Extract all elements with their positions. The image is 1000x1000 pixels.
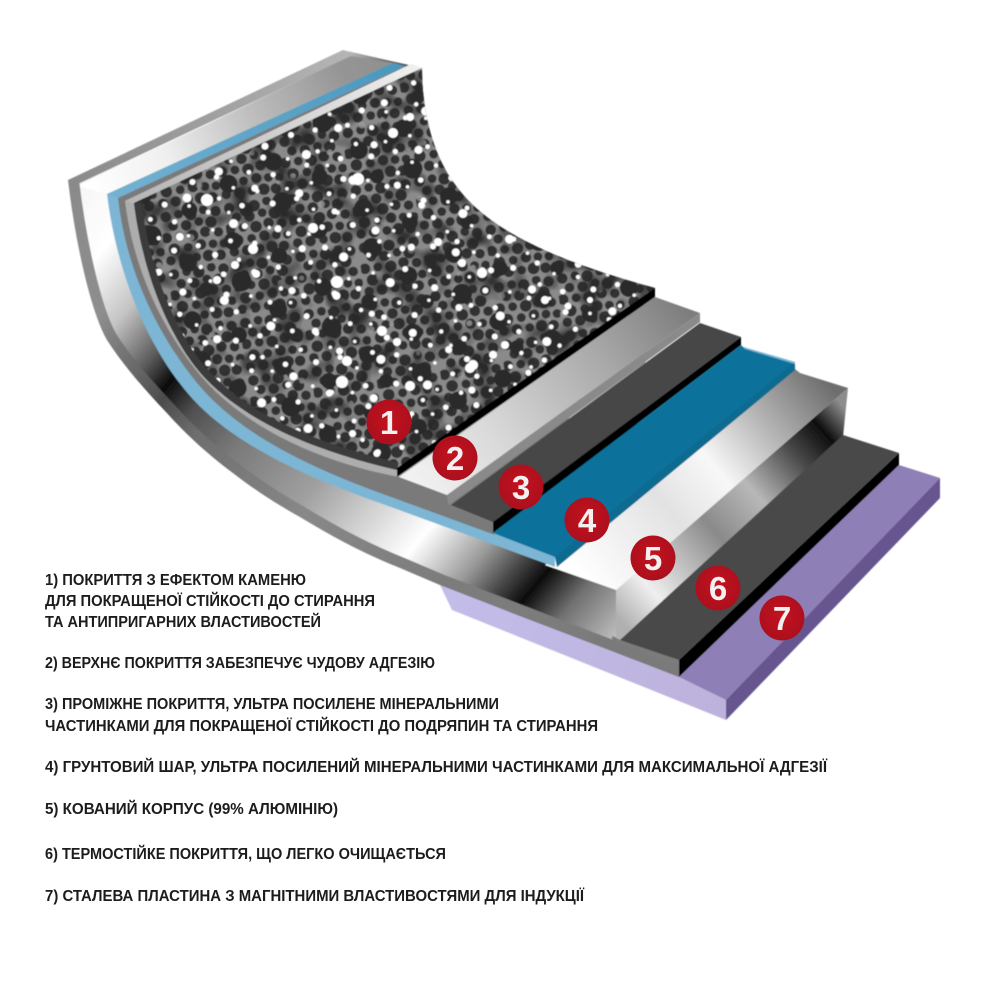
legend item 1: ДЛЯ ПОКРАЩЕНОЇ СТІЙКОСТІ ДО СТИРАННЯ <box>45 592 375 610</box>
marker 7 <box>760 596 804 640</box>
layer 3: intermediate coating face <box>451 323 741 533</box>
legend item 3: 3) ПРОМІЖНЕ ПОКРИТТЯ, УЛЬТРА ПОСИЛЕНЕ МІНЕРАЛЬНИМИ <box>45 696 499 713</box>
marker 3 <box>498 464 544 510</box>
layer 5: forged aluminium body <box>68 50 848 677</box>
legend item 4: 4) ГРУНТОВИЙ ШАР, УЛЬТРА ПОСИЛЕНИЙ МІНЕРАЛЬНИМИ ЧАСТИНКАМИ ДЛЯ МАКСИМАЛЬНОЇ АДГЕЗІЇ <box>45 758 828 776</box>
marker 4: 4 <box>578 502 597 539</box>
legend item 6: 6) ТЕРМОСТІЙКЕ ПОКРИТТЯ, ЩО ЛЕГКО ОЧИЩАЄТЬСЯ <box>45 845 446 863</box>
legend item 7: 7) СТАЛЕВА ПЛАСТИНА З МАГНІТНИМИ ВЛАСТИВОСТЯМИ ДЛЯ ІНДУКЦІЇ <box>45 888 585 905</box>
legend item 1: ТА АНТИПРИГАРНИХ ВЛАСТИВОСТЕЙ <box>45 613 321 631</box>
marker 7: 7 <box>773 600 791 637</box>
marker 1 <box>366 400 412 444</box>
rim of the light grey band <box>125 64 422 203</box>
layered pan cross-section diagram <box>68 50 940 720</box>
legend item 1: 1) ПОКРИТТЯ З ЕФЕКТОМ КАМЕНЮ <box>45 572 306 589</box>
marker 5: 5 <box>644 540 662 577</box>
layer 3 edge: mid grey band along the curve <box>118 66 655 535</box>
marker 6 <box>696 566 740 610</box>
layer 4 edge: light blue band along the curve <box>107 63 555 567</box>
marker 6: 6 <box>709 570 727 607</box>
marker 2 <box>432 436 478 480</box>
legend text <box>45 572 828 905</box>
marker 3: 3 <box>512 469 530 506</box>
marker 2: 2 <box>446 440 464 477</box>
layer 6: dark heat-resistant coating <box>620 435 899 677</box>
legend item 2: 2) ВЕРХНЄ ПОКРИТТЯ ЗАБЕЗПЕЧУЄ ЧУДОВУ АДГЕЗІЮ <box>45 655 435 672</box>
layer 4: blue primer face <box>493 345 795 567</box>
layer 2: top coating face <box>399 297 700 505</box>
marker 1: 1 <box>380 404 398 441</box>
layer 7: purple steel plate <box>440 465 940 720</box>
legend item 1 <box>45 572 375 631</box>
layer 1: stone-effect coating <box>120 60 660 480</box>
numbered markers <box>366 400 804 640</box>
legend item 5: 5) КОВАНИЙ КОРПУС (99% АЛЮМІНІЮ) <box>45 800 338 818</box>
legend item 3: ЧАСТИНКАМИ ДЛЯ ПОКРАЩЕНОЇ СТІЙКОСТІ ДО ПОДРЯПИН ТА СТИРАННЯ <box>45 717 598 735</box>
rim of the blue band <box>107 63 405 198</box>
legend item 3 <box>45 696 598 735</box>
marker 4 <box>564 498 610 542</box>
marker 5 <box>630 536 676 580</box>
layer 2 edge: light grey band along the curve <box>125 66 655 505</box>
